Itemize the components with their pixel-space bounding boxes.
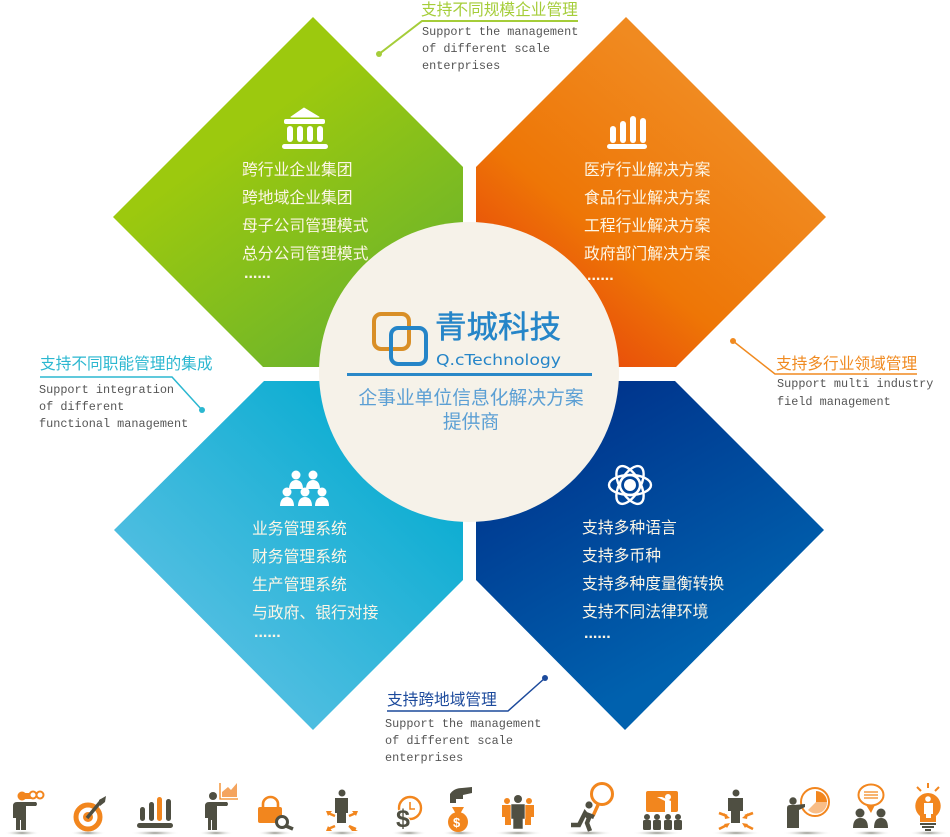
callout: region navy: of different scale: [385, 734, 513, 748]
icon: presenter with pie chart: [787, 788, 829, 828]
callout: scale green: Support the management: [422, 25, 578, 39]
green quadrant list: ......: [244, 265, 271, 282]
callout: function cyan: 支持不同职能管理的集成: [40, 355, 213, 373]
callout: region navy: enterprises: [385, 751, 463, 765]
callout: scale green: enterprises: [422, 59, 500, 73]
orange quadrant list: 工程行业解决方案: [584, 217, 711, 235]
panel: navy quadrant: [476, 381, 824, 730]
tagline: 企事业单位信息化解决方案: [358, 387, 584, 408]
logo english name: Q.cTechnology: [436, 351, 561, 369]
callout: industry orange: 支持多行业领域管理: [776, 355, 917, 373]
icon: hand and money bag: [448, 787, 472, 832]
icon: runner with magnifier: [571, 784, 612, 831]
panel: cyan quadrant: [114, 381, 463, 730]
green quadrant list: 母子公司管理模式: [242, 217, 369, 235]
callout: function cyan: Support integration: [39, 383, 174, 397]
cyan quadrant list: 业务管理系统: [252, 520, 347, 538]
tagline: 提供商: [443, 411, 499, 432]
icon: team group: [502, 795, 534, 829]
icon: person with outward arrows: [326, 790, 358, 831]
navy quadrant list: 支持多币种: [582, 547, 661, 565]
logo mark: [374, 314, 426, 364]
callout: scale green: [376, 1, 578, 73]
callout: industry orange: field management: [777, 395, 891, 409]
icon: atom: [609, 462, 651, 508]
callout: function cyan: [39, 355, 213, 431]
icon shadows: [4, 830, 949, 836]
icon: clock and dollar: $: [396, 805, 410, 833]
callout: industry orange: [730, 338, 933, 409]
divider line: [347, 373, 592, 376]
orange quadrant list: [584, 161, 711, 284]
cyan quadrant list: [252, 520, 379, 641]
icon: two people with speech bubble: [853, 784, 888, 828]
navy quadrant list: ......: [584, 625, 611, 642]
panel: orange quadrant: [476, 17, 826, 367]
tagline: [358, 387, 584, 432]
navy quadrant list: [582, 519, 724, 642]
orange quadrant list: ......: [587, 267, 614, 284]
icon: man with binoculars: [13, 792, 44, 830]
green quadrant list: 总分公司管理模式: [242, 245, 369, 263]
panel: central circle: [319, 222, 619, 522]
icon: bar chart: [607, 116, 647, 149]
icon row: [4, 783, 949, 836]
navy quadrant list: 支持多种语言: [582, 519, 677, 537]
icon: padlock with magnifier: [258, 797, 293, 829]
orange quadrant list: 医疗行业解决方案: [584, 161, 711, 179]
cyan quadrant list: 与政府、银行对接: [252, 604, 379, 622]
callout: region navy: 支持跨地域管理: [387, 691, 497, 709]
callout: industry orange: Support multi industry: [777, 377, 933, 391]
icon: target with dart: [76, 796, 106, 829]
logo name: 青城科技: [435, 310, 561, 345]
cyan quadrant list: ......: [254, 624, 281, 641]
callout: function cyan: functional management: [39, 417, 188, 431]
icon: bar chart: [137, 797, 173, 828]
orange quadrant list: 食品行业解决方案: [584, 189, 711, 207]
icon: light bulb: [915, 783, 941, 831]
cyan quadrant list: 财务管理系统: [252, 548, 347, 566]
callout: scale green: 支持不同规模企业管理: [421, 1, 578, 19]
callout: region navy: Support the management: [385, 717, 541, 731]
icon: person with inward arrows: [719, 790, 753, 829]
panel: green quadrant: [113, 17, 463, 367]
cyan quadrant list: 生产管理系统: [252, 576, 347, 594]
icon: clock and dollar: [396, 797, 421, 833]
green quadrant list: 跨行业企业集团: [242, 161, 353, 179]
callout: function cyan: of different: [39, 400, 124, 414]
icon: hand and money bag: $: [453, 815, 461, 830]
icon: bank building: [282, 108, 328, 149]
callout: region navy: [385, 675, 548, 765]
icon: audience and board: [643, 791, 682, 830]
green quadrant list: 跨地域企业集团: [242, 189, 353, 207]
callout: scale green: of different scale: [422, 42, 550, 56]
green quadrant list: [242, 161, 369, 282]
orange quadrant list: 政府部门解决方案: [584, 245, 711, 263]
navy quadrant list: 支持不同法律环境: [582, 602, 709, 621]
navy quadrant list: 支持多种度量衡转换: [582, 575, 724, 593]
icon: people group: [280, 470, 329, 506]
icon: presenter with chart: [205, 783, 238, 830]
